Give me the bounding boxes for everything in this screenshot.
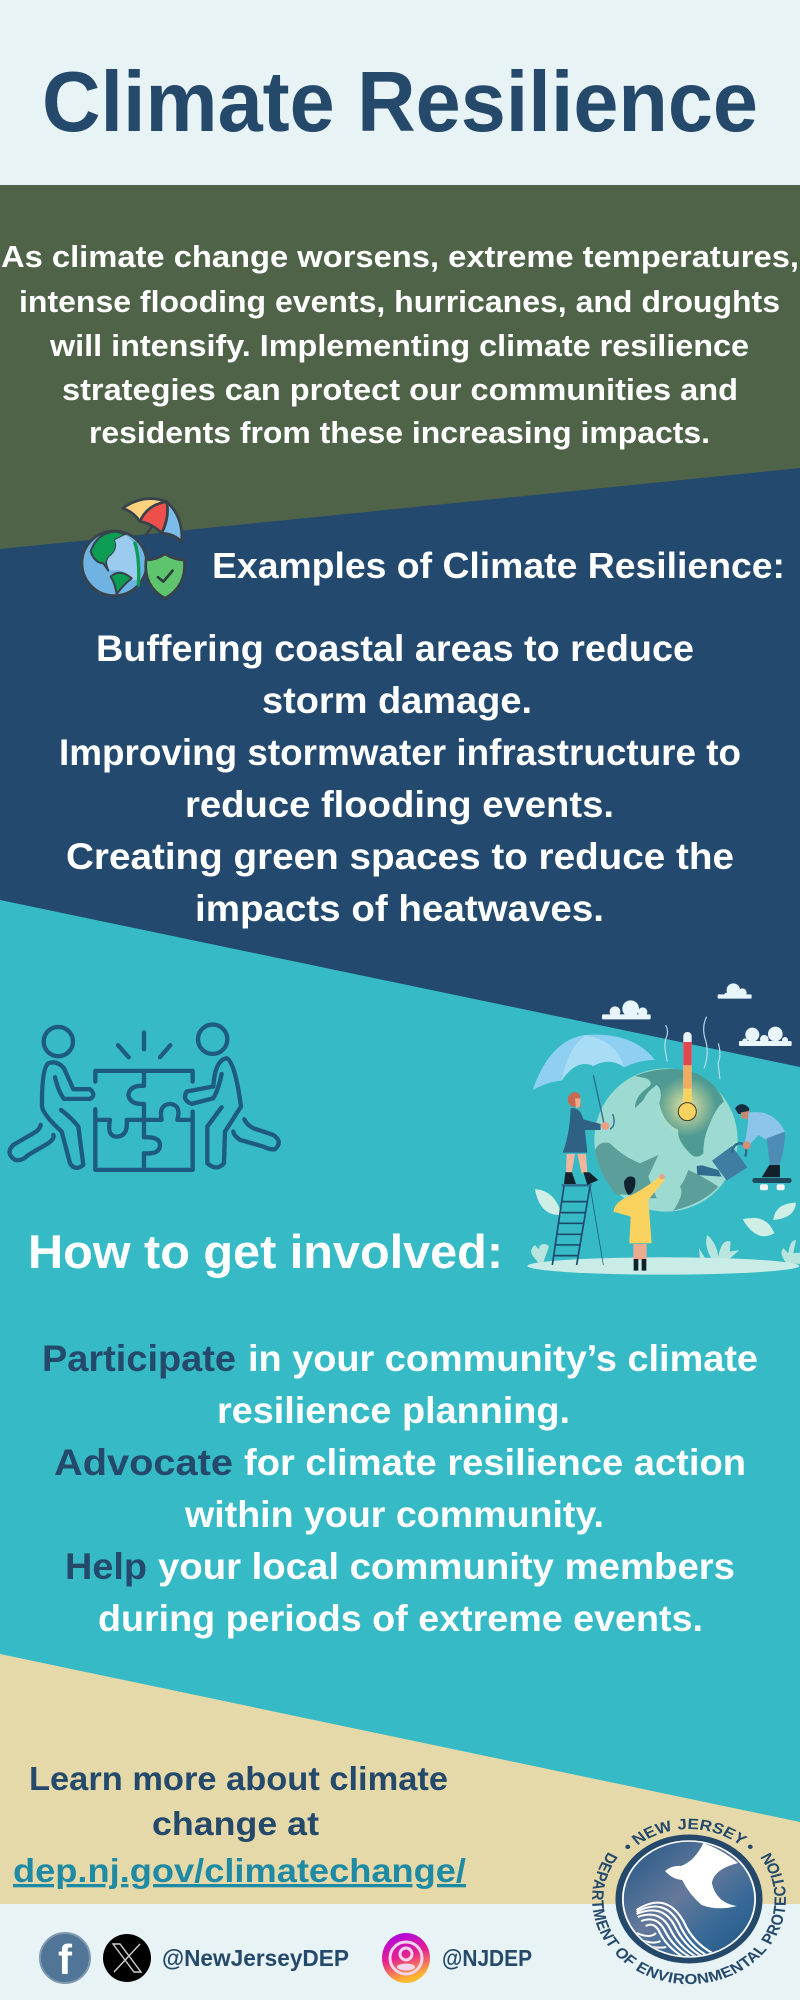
title: Climate Resilience bbox=[42, 55, 758, 150]
NJDEP seal: • NEW JERSEY • bbox=[625, 1818, 753, 1849]
background: title band bbox=[0, 0, 800, 185]
woman in yellow dress bbox=[613, 1174, 665, 1271]
involvement list: Advocate bbox=[54, 1442, 233, 1483]
intro text block: intense flooding events, hurricanes, and droughts bbox=[19, 284, 780, 319]
involvement list: in your community’s climate bbox=[248, 1338, 758, 1379]
woman with umbrella bbox=[563, 1092, 609, 1185]
learn more text bbox=[13, 1760, 466, 1889]
NJDEP seal: DEPARTMENT OF ENVIRONMENTAL PROTECTION bbox=[592, 1852, 786, 1984]
heading: how to get involved: How to get involved: bbox=[28, 1225, 503, 1278]
involvement list: Help bbox=[65, 1546, 147, 1587]
intro text block bbox=[1, 239, 799, 450]
involvement list: for climate resilience action bbox=[244, 1442, 746, 1483]
globe bbox=[594, 1068, 738, 1212]
background: footer band bbox=[0, 1904, 800, 2000]
icon: Facebook: f bbox=[58, 1936, 73, 1983]
involvement list: within your community. bbox=[184, 1494, 604, 1535]
examples list: Buffering coastal areas to reduce bbox=[96, 628, 694, 669]
learn more text: dep.nj.gov/climatechange/ bbox=[13, 1852, 466, 1889]
ladder bbox=[552, 1185, 603, 1265]
intro text block: strategies can protect our communities and bbox=[62, 372, 738, 407]
examples list: impacts of heatwaves. bbox=[195, 888, 604, 929]
examples list: storm damage. bbox=[262, 680, 532, 721]
umbrella bbox=[533, 1035, 655, 1090]
icon: Instagram bbox=[382, 1933, 430, 1983]
involvement list: your local community members bbox=[158, 1546, 735, 1587]
man with watering can bbox=[697, 1104, 792, 1190]
icon: Facebook bbox=[40, 1933, 90, 1983]
background: teal involvement panel bbox=[0, 900, 800, 1830]
handle: NewJerseyDEP: @NewJerseyDEP bbox=[162, 1945, 349, 1971]
thermometer bbox=[683, 1032, 692, 1105]
examples list: Creating green spaces to reduce the bbox=[66, 836, 734, 877]
learn more text: Learn more about climate bbox=[29, 1760, 448, 1797]
involvement list: during periods of extreme events. bbox=[98, 1598, 703, 1639]
involvement list: Participate bbox=[42, 1338, 236, 1379]
intro text block: As climate change worsens, extreme temperatures, bbox=[1, 239, 799, 274]
ground and plants bbox=[531, 1235, 800, 1267]
handle: NJDEP: @NJDEP bbox=[442, 1945, 532, 1971]
icon: two people joining puzzle pieces bbox=[10, 1025, 279, 1170]
illustration: people protecting a warming globe bbox=[527, 983, 800, 1275]
icon: globe with umbrella and shield bbox=[82, 499, 185, 598]
clouds bbox=[602, 983, 792, 1046]
intro text block: residents from these increasing impacts. bbox=[89, 415, 710, 450]
learn more text: change at bbox=[152, 1805, 319, 1842]
heading: examples: Examples of Climate Resilience: bbox=[212, 545, 785, 586]
background: green intro panel bbox=[0, 185, 800, 585]
involvement list: resilience planning. bbox=[217, 1390, 570, 1431]
involvement list bbox=[42, 1338, 758, 1639]
examples list: Improving stormwater infrastructure to bbox=[59, 732, 741, 773]
examples list bbox=[59, 628, 741, 929]
leaves bbox=[535, 1189, 796, 1236]
examples list: reduce flooding events. bbox=[185, 784, 614, 825]
intro text block: will intensify. Implementing climate resilience bbox=[49, 328, 749, 363]
heat waves bbox=[665, 1017, 720, 1079]
seal wave bbox=[636, 1902, 712, 1956]
background: tan learn-more panel bbox=[0, 1654, 800, 1905]
background: navy examples panel bbox=[0, 468, 800, 1080]
icon: X bbox=[103, 1934, 151, 1982]
seal bird bbox=[665, 1843, 738, 1908]
